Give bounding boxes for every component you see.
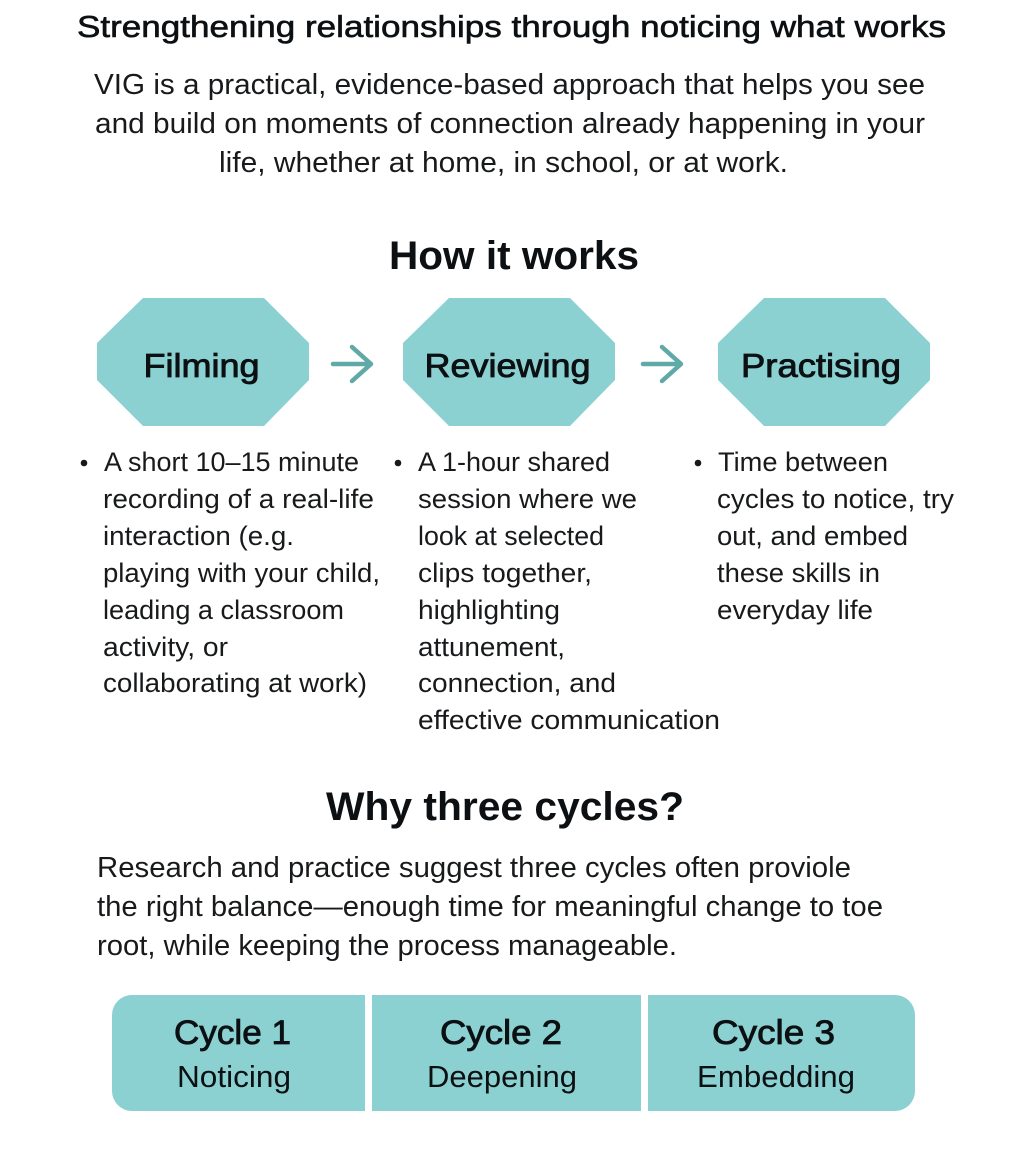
panel: reviewing step: Reviewing — [424, 347, 590, 384]
text block: practising description: cycles to notice, try — [717, 484, 955, 514]
text block: why three cycles explanation — [97, 852, 883, 962]
panel: cycle 2: Cycle 2 — [440, 1014, 562, 1052]
panel: cycle 2: Deepening — [427, 1059, 577, 1094]
intro paragraph — [94, 69, 925, 179]
panel: cycle 3: Cycle 3 — [712, 1014, 835, 1052]
text block: why three cycles explanation: the right balance—enough time for meaningful change to toe — [97, 891, 883, 923]
text block: filming description: collaborating at work) — [103, 668, 367, 698]
text block: reviewing description: highlighting — [418, 595, 560, 625]
intro paragraph: life, whether at home, in school, or at work. — [219, 147, 788, 179]
panel: cycle 3 — [648, 995, 915, 1111]
text block: reviewing description: A 1-hour shared — [418, 447, 610, 477]
panel: cycle 1 — [112, 995, 365, 1111]
panel: practising step — [718, 298, 930, 426]
panel: cycle 2 — [372, 995, 641, 1111]
heading: why three cycles: Why three cycles? — [326, 785, 684, 829]
text block: reviewing description: attunement, — [418, 632, 565, 662]
panel: filming step: Filming — [144, 347, 260, 384]
text block: practising description — [695, 447, 955, 625]
text block: filming description: recording of a real-life — [103, 484, 374, 514]
text block: filming description: A short 10–15 minute — [104, 447, 359, 477]
intro paragraph: VIG is a practical, evidence-based approach that helps you see — [94, 69, 925, 101]
panel: cycle 1: Noticing — [177, 1059, 291, 1094]
text block: reviewing description: connection, and — [418, 668, 616, 698]
text block: practising description: out, and embed — [717, 521, 908, 551]
panel: practising step: Practising — [741, 347, 901, 384]
text block: why three cycles explanation: Research and practice suggest three cycles often proviole — [97, 852, 851, 884]
text block: reviewing description: session where we — [418, 484, 637, 514]
heading: how it works: How it works — [389, 234, 639, 278]
text block: practising description: everyday life — [717, 595, 873, 625]
text block: reviewing description: effective communication — [418, 705, 720, 735]
intro paragraph: and build on moments of connection already happening in your — [95, 108, 925, 140]
panel: cycle 1: Cycle 1 — [174, 1014, 291, 1052]
text block: filming description — [81, 447, 380, 698]
title: Strengthening relationships through noticing what works — [77, 10, 946, 44]
text block: reviewing description: look at selected — [418, 521, 604, 551]
panel: reviewing step — [403, 298, 615, 426]
text block: reviewing description: clips together, — [418, 558, 592, 588]
text block: reviewing description — [395, 447, 720, 735]
text block: why three cycles explanation: root, while keeping the process manageable. — [97, 930, 677, 962]
panel: filming step — [97, 298, 309, 426]
text block: filming description: playing with your child, — [103, 558, 380, 588]
arrow: filming to reviewing — [333, 347, 371, 381]
text block: filming description: leading a classroom — [103, 595, 344, 625]
arrow: reviewing to practising — [643, 347, 681, 381]
text block: filming description: activity, or — [103, 632, 228, 662]
text block: practising description: Time between — [718, 447, 888, 477]
panel: cycle 3: Embedding — [697, 1059, 855, 1094]
text block: practising description: these skills in — [717, 558, 880, 588]
text block: filming description: interaction (e.g. — [103, 521, 294, 551]
